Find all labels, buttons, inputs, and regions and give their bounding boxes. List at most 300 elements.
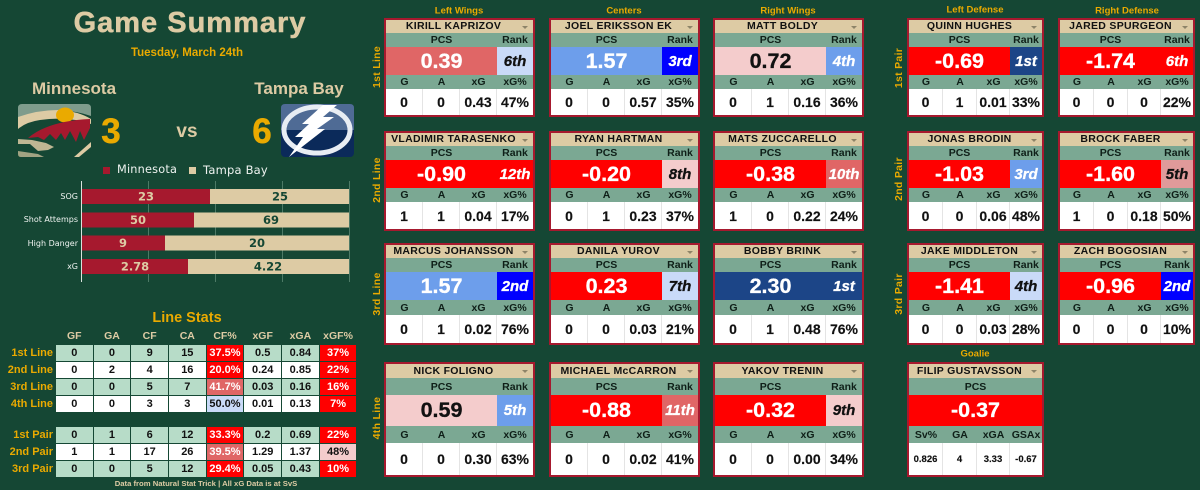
table: forward line stats: 0.5 (255, 347, 270, 359)
player card: Danila Yurov: PCS (596, 259, 617, 271)
table: defense pair stats: 12 (181, 463, 193, 475)
player card: Quinn Hughes: A (956, 76, 964, 88)
table: defense pair stats: 0 (71, 429, 77, 441)
player card: Kirill Kaprizov: 0 (437, 94, 445, 110)
player card: Mats Zuccarello: 1 (729, 208, 737, 224)
bar chart: team comparison: 4.22 (254, 260, 282, 274)
player card: Yakov Trenin (713, 362, 864, 477)
player card: Matt Boldy: 0 (729, 94, 737, 110)
player card: Matt Boldy: A (767, 76, 774, 88)
player card: Marcus Johansson: MARCUS JOHANSSON (393, 245, 514, 257)
player card: Jonas Brodin: G (922, 189, 930, 201)
column label: Goalie: Goalie (960, 348, 990, 360)
player card: Marcus Johansson: 0.02 (464, 321, 492, 337)
player card: Brock Faber: 0 (1107, 208, 1114, 224)
bar chart: team comparison: 25 (272, 190, 288, 204)
player card: Matt Boldy: xG% (832, 76, 856, 88)
player card: Danila Yurov: G (565, 302, 574, 314)
bar chart: team comparison: 2.78 (121, 260, 149, 274)
player card: Nick Foligno: 0.30 (464, 451, 492, 467)
player card: Marcus Johansson: 0 (400, 321, 408, 337)
player card: Michael McCarron: -0.88 (582, 398, 631, 422)
row label: 1st Line: 1st Line (371, 46, 383, 88)
player card: Jake Middleton: 0 (956, 321, 963, 337)
player card: Ryan Hartman: 8th (669, 166, 691, 182)
bar chart: team comparison: 50 (130, 213, 146, 227)
table: defense pair stats: 0 (109, 463, 115, 475)
player card: Vladimir Tarasenko (384, 131, 535, 231)
player card: Jake Middleton: A (956, 302, 964, 314)
table: forward line stats: 3 (147, 398, 153, 410)
player card: Ryan Hartman (549, 131, 700, 231)
player card: Mats Zuccarello: xG% (832, 189, 856, 201)
player card: Matt Boldy (713, 18, 864, 117)
table: defense pair stats: 17 (144, 446, 156, 458)
goalie card: Filip Gustavsson (907, 362, 1044, 477)
player card: Joel Eriksson Ek: 0.57 (629, 94, 657, 110)
player card: Yakov Trenin: -0.32 (746, 398, 795, 422)
player card: Vladimir Tarasenko: G (400, 189, 409, 201)
bar chart: team comparison: xG (67, 262, 78, 271)
player card: Jared Spurgeon: 0 (1107, 94, 1114, 110)
player card: Jared Spurgeon: 22% (1163, 94, 1191, 110)
player card: Nick Foligno: 0.59 (421, 398, 462, 422)
player card: Zach Bogosian: A (1107, 302, 1115, 314)
table column headers: GF (67, 330, 82, 342)
row label: 1st Pair: 1st Pair (893, 48, 905, 88)
player card: Vladimir Tarasenko: 17% (501, 208, 529, 224)
player card: Michael McCarron: xG (636, 428, 650, 440)
player card: Nick Foligno: Rank (502, 380, 528, 392)
player card: Quinn Hughes: QUINN HUGHES (927, 20, 1012, 32)
team name: Minnesota: Minnesota (32, 79, 116, 98)
table: forward line stats: 0.16 (290, 381, 311, 393)
player card: Michael McCarron: 11th (665, 402, 695, 419)
table: forward line stats (56, 345, 356, 412)
player card: Jared Spurgeon: xG (1137, 76, 1152, 88)
player card: Joel Eriksson Ek: PCS (596, 34, 617, 46)
player card: Marcus Johansson: xG (471, 302, 486, 314)
table: forward line stats: 0 (71, 381, 77, 393)
player card: Bobby Brink: 1st (833, 278, 855, 294)
player card: Kirill Kaprizov: KIRILL KAPRIZOV (406, 20, 501, 32)
goalie card: Filip Gustavsson: GA (952, 428, 968, 440)
player card: Yakov Trenin: 0.00 (793, 451, 821, 467)
player card: Marcus Johansson: Rank (502, 259, 528, 271)
player card: Matt Boldy: 36% (830, 94, 858, 110)
player card: Zach Bogosian: 0 (1107, 321, 1114, 337)
table: forward line stats: 20.0% (209, 364, 241, 376)
table column headers: CF% (213, 330, 237, 342)
player card: Bobby Brink: xG% (832, 302, 856, 314)
player card: Bobby Brink: BOBBY BRINK (744, 245, 821, 257)
table: defense pair stats: 0.05 (252, 463, 273, 475)
player card: Zach Bogosian: 0 (1073, 321, 1080, 337)
player card: Vladimir Tarasenko: xG (471, 189, 486, 201)
player card: Nick Foligno: xG% (503, 428, 527, 440)
player card: Kirill Kaprizov: PCS (431, 34, 452, 46)
player card: Matt Boldy: G (729, 76, 738, 88)
title: Game Summary (74, 7, 306, 39)
player card: Danila Yurov: 0 (565, 321, 573, 337)
row labels: lines: 4th Line (11, 398, 53, 410)
table: defense pair stats: 29.4% (209, 463, 241, 475)
player card: Vladimir Tarasenko: -0.90 (417, 162, 466, 186)
player card: Jake Middleton: G (922, 302, 930, 314)
table: forward line stats: 7 (184, 381, 190, 393)
player card: Danila Yurov: 0 (602, 321, 610, 337)
player card: Danila Yurov: xG (636, 302, 650, 314)
score: Minnesota: 3 (101, 112, 121, 151)
player card: Ryan Hartman: G (565, 189, 574, 201)
player card: Yakov Trenin: 0 (729, 451, 737, 467)
player card: Kirill Kaprizov: 0.43 (464, 94, 492, 110)
table: defense pair stats: 0 (71, 463, 77, 475)
bar chart: team comparison: 23 (138, 190, 154, 204)
player card: Jake Middleton: xG% (1014, 302, 1038, 314)
player card: Joel Eriksson Ek: xG (636, 76, 650, 88)
footer note: Data from Natural Stat Trick | All xG Data is at SvS (115, 479, 297, 488)
goalie card: Filip Gustavsson: Sv% (915, 428, 937, 440)
player card: Bobby Brink: A (767, 302, 774, 314)
versus label: vs (176, 121, 198, 142)
table: forward line stats: 0 (109, 381, 115, 393)
player card: Mats Zuccarello: 10th (829, 166, 859, 182)
column label: Right Wings: Right Wings (760, 6, 816, 16)
player card: Ryan Hartman: 1 (602, 208, 610, 224)
table: defense pair stats: 22% (327, 429, 349, 441)
player card: Marcus Johansson: 1 (437, 321, 445, 337)
player card: Joel Eriksson Ek: JOEL ERIKSSON EK (565, 20, 672, 32)
player card: Matt Boldy: 0.16 (793, 94, 821, 110)
player card: Nick Foligno: G (400, 428, 409, 440)
goalie card: Filip Gustavsson: GSAx (1012, 428, 1040, 440)
player card: Jake Middleton (907, 243, 1044, 345)
player card: Brock Faber: 0.18 (1130, 208, 1158, 224)
player card: Quinn Hughes: G (922, 76, 930, 88)
player card: Matt Boldy: 1 (766, 94, 774, 110)
player card: Quinn Hughes: xG% (1014, 76, 1038, 88)
player card: Jake Middleton: xG (986, 302, 1000, 314)
player card: Michael McCarron: MICHAEL McCARRON (560, 365, 677, 377)
player card: Matt Boldy: MATT BOLDY (747, 20, 818, 32)
player card: Kirill Kaprizov: xG% (503, 76, 527, 88)
bar chart: team comparison: SOG (60, 192, 78, 201)
player card: Brock Faber: BROCK FABER (1080, 133, 1161, 145)
player card: Brock Faber: xG% (1165, 189, 1189, 201)
column label: Left Wings: Left Wings (435, 6, 483, 16)
chart legend: Minnesota (117, 163, 177, 176)
player card: Bobby Brink: 1 (766, 321, 774, 337)
player card: Brock Faber (1058, 131, 1195, 231)
player card: Nick Foligno: 5th (504, 402, 526, 419)
column label: Centers: Centers (606, 6, 642, 16)
player card: Jonas Brodin: 0.06 (979, 208, 1007, 224)
table: forward line stats: 0 (71, 347, 77, 359)
bar chart: team comparison: High Danger (28, 239, 79, 248)
player card: Jake Middleton: 0 (922, 321, 929, 337)
player card: Zach Bogosian: 2nd (1164, 278, 1190, 294)
player card: Yakov Trenin: Rank (831, 380, 857, 392)
player card: Matt Boldy: 0.72 (750, 48, 791, 72)
player card: Kirill Kaprizov: 47% (501, 94, 529, 110)
table: forward line stats: 9 (147, 347, 153, 359)
player card: Marcus Johansson: 1.57 (421, 274, 462, 298)
player card: Nick Foligno (384, 362, 535, 477)
goalie card: Filip Gustavsson: 3.33 (984, 454, 1002, 464)
player card: Quinn Hughes: Rank (1013, 34, 1039, 46)
row label: 2nd Line: 2nd Line (371, 157, 383, 203)
row label: 2nd Pair: 2nd Pair (893, 157, 905, 201)
player card: Jonas Brodin: JONAS BRODIN (927, 133, 1012, 145)
player card: Marcus Johansson: xG% (503, 302, 527, 314)
player card: Michael McCarron: G (565, 428, 574, 440)
player card: Vladimir Tarasenko: 12th (500, 166, 530, 182)
player card: Jonas Brodin: Rank (1013, 147, 1039, 159)
player card: Zach Bogosian: 0 (1140, 321, 1148, 337)
row labels: lines: 2nd Line (8, 364, 53, 376)
player card: Jared Spurgeon: JARED SPURGEON (1069, 20, 1172, 32)
table: defense pair stats: 12 (181, 429, 193, 441)
player card: Michael McCarron (549, 362, 700, 477)
player card: Jonas Brodin: 0 (922, 208, 929, 224)
table: defense pair stats: 1 (71, 446, 77, 458)
player card: Bobby Brink: 0 (729, 321, 737, 337)
table column headers: GA (104, 330, 120, 342)
row labels: pairs: 2nd Pair (10, 446, 53, 458)
column label: Right Defense: Right Defense (1095, 6, 1159, 16)
player card: Matt Boldy: 4th (833, 52, 855, 70)
player card: Yakov Trenin: YAKOV TRENIN (742, 365, 823, 377)
table: defense pair stats (56, 427, 356, 477)
player card: Joel Eriksson Ek: Rank (667, 34, 693, 46)
player card: Yakov Trenin: G (729, 428, 738, 440)
player card: Matt Boldy: xG (800, 76, 814, 88)
player card: Jared Spurgeon: A (1107, 76, 1115, 88)
player card: Kirill Kaprizov: xG (471, 76, 486, 88)
table: defense pair stats: 0.2 (255, 429, 270, 441)
column label: Left Defense: Left Defense (946, 4, 1004, 16)
player card: Nick Foligno: xG (471, 428, 486, 440)
player card: Quinn Hughes: 0.01 (979, 94, 1007, 110)
heading: Line Stats: Line Stats (152, 310, 222, 326)
player card: Jared Spurgeon: xG% (1165, 76, 1189, 88)
player card: Michael McCarron: 0.02 (629, 451, 657, 467)
player card: Ryan Hartman: A (603, 189, 610, 201)
player card: Michael McCarron: 41% (666, 451, 694, 467)
player card: Mats Zuccarello (713, 131, 864, 231)
player card: Danila Yurov: DANILA YUROV (577, 245, 660, 257)
goalie card: Filip Gustavsson: PCS (965, 380, 986, 392)
player card: Jonas Brodin: xG (986, 189, 1000, 201)
player card: Jonas Brodin (907, 131, 1044, 231)
goalie card: Filip Gustavsson: -0.67 (1015, 454, 1037, 464)
player card: Quinn Hughes: 1st (1015, 52, 1037, 70)
player card: Quinn Hughes: xG (986, 76, 1000, 88)
player card: Brock Faber: PCS (1100, 147, 1121, 159)
bar chart: team comparison: Shot Attemps (24, 215, 78, 224)
player card: Jonas Brodin: 3rd (1014, 166, 1038, 182)
player card: Kirill Kaprizov (384, 18, 535, 117)
player card: Vladimir Tarasenko: xG% (503, 189, 527, 201)
player card: Zach Bogosian: G (1073, 302, 1081, 314)
player card: Ryan Hartman: Rank (667, 147, 693, 159)
player card: Matt Boldy: Rank (831, 34, 857, 46)
player card: Yakov Trenin: xG% (832, 428, 856, 440)
player card: Jared Spurgeon: 6th (1166, 52, 1188, 70)
player card: Ryan Hartman: PCS (596, 147, 617, 159)
table: defense pair stats: 39.5% (209, 446, 241, 458)
player card: Danila Yurov: 0.23 (586, 274, 627, 298)
bar chart: team comparison: 69 (263, 213, 279, 227)
player card: Nick Foligno: 0 (437, 451, 445, 467)
player card: Zach Bogosian: xG (1137, 302, 1152, 314)
table: defense pair stats: 48% (327, 446, 349, 458)
player card: Yakov Trenin: 0 (766, 451, 774, 467)
date: Tuesday, March 24th (131, 47, 243, 59)
player card: Bobby Brink: Rank (831, 259, 857, 271)
player card: Zach Bogosian: Rank (1164, 259, 1190, 271)
player card: Vladimir Tarasenko: A (438, 189, 445, 201)
table: forward line stats: 15 (181, 347, 193, 359)
goalie card: Filip Gustavsson: FILIP GUSTAVSSON (917, 365, 1022, 377)
player card: Quinn Hughes: PCS (949, 34, 970, 46)
player card: Danila Yurov: xG% (668, 302, 692, 314)
player card: Joel Eriksson Ek: 1.57 (586, 48, 627, 72)
player card: Zach Bogosian: 10% (1163, 321, 1191, 337)
table: forward line stats: 4 (147, 364, 153, 376)
player card: Bobby Brink: 2.30 (750, 274, 791, 298)
player card: Ryan Hartman: 0.23 (629, 208, 657, 224)
player card: Joel Eriksson Ek: 0 (602, 94, 610, 110)
table column headers: CA (180, 330, 195, 342)
player card: Nick Foligno: 0 (400, 451, 408, 467)
row labels: pairs: 3rd Pair (12, 463, 53, 475)
player card: Brock Faber: A (1107, 189, 1115, 201)
player card: Bobby Brink (713, 243, 864, 345)
player card: Jared Spurgeon: 0 (1140, 94, 1148, 110)
player card: Michael McCarron: Rank (667, 380, 693, 392)
player card: Marcus Johansson: A (438, 302, 445, 314)
player card: Kirill Kaprizov: G (400, 76, 409, 88)
player card: Kirill Kaprizov: A (438, 76, 445, 88)
player card: Brock Faber: 1 (1073, 208, 1080, 224)
player card: Vladimir Tarasenko: VLADIMIR TARASENKO (391, 133, 516, 145)
player card: Jonas Brodin: 48% (1012, 208, 1040, 224)
goalie card: Filip Gustavsson: 4 (957, 454, 962, 464)
player card: Joel Eriksson Ek: G (565, 76, 574, 88)
table: defense pair stats: 5 (147, 463, 153, 475)
table: defense pair stats: 10% (327, 463, 349, 475)
player card: Yakov Trenin: xG (800, 428, 814, 440)
player card: Jonas Brodin: 0 (956, 208, 963, 224)
icon: Tampa Bay logo (281, 104, 354, 157)
player card: Bobby Brink: 0.48 (793, 321, 821, 337)
player card: Jared Spurgeon: Rank (1164, 34, 1190, 46)
player card: Joel Eriksson Ek: 0 (565, 94, 573, 110)
player card: Ryan Hartman: xG (636, 189, 650, 201)
player card: Mats Zuccarello: 24% (830, 208, 858, 224)
bar chart: team comparison: 20 (249, 236, 265, 250)
row labels: pairs: 1st Pair (13, 429, 53, 441)
table: forward line stats: 7% (330, 398, 346, 410)
table: defense pair stats: 6 (147, 429, 153, 441)
player card: Brock Faber: -1.60 (1086, 162, 1135, 186)
player card: Bobby Brink: PCS (760, 259, 781, 271)
player card: Mats Zuccarello: MATS ZUCCARELLO (728, 133, 837, 145)
player card: Kirill Kaprizov: 0.39 (421, 48, 462, 72)
player card: Bobby Brink: G (729, 302, 738, 314)
table column headers: xGA (290, 330, 311, 342)
player card: Yakov Trenin: 34% (830, 451, 858, 467)
table: forward line stats: 50.0% (209, 398, 241, 410)
player card: Danila Yurov: Rank (667, 259, 693, 271)
player card: Quinn Hughes: 33% (1012, 94, 1040, 110)
player card: Vladimir Tarasenko: PCS (431, 147, 452, 159)
player card: Mats Zuccarello: 0.22 (793, 208, 821, 224)
table: defense pair stats: 1 (109, 446, 115, 458)
player card: Kirill Kaprizov: 0 (400, 94, 408, 110)
chart legend (103, 163, 268, 177)
player card: Joel Eriksson Ek: A (603, 76, 610, 88)
player card: Quinn Hughes: -0.69 (935, 48, 984, 72)
player card: Marcus Johansson (384, 243, 535, 345)
table: forward line stats: 0.01 (252, 398, 273, 410)
player card: Jake Middleton: PCS (949, 259, 970, 271)
player card: Yakov Trenin: A (767, 428, 774, 440)
player card: Zach Bogosian (1058, 243, 1195, 345)
player card: Quinn Hughes: 1 (956, 94, 963, 110)
player card: Kirill Kaprizov: Rank (502, 34, 528, 46)
player card: Matt Boldy: PCS (760, 34, 781, 46)
player card: Nick Foligno: NICK FOLIGNO (413, 365, 494, 377)
table: forward line stats: 0.03 (252, 381, 273, 393)
player card: Jonas Brodin: xG% (1014, 189, 1038, 201)
player card: Zach Bogosian: ZACH BOGOSIAN (1074, 245, 1167, 257)
player card: Mats Zuccarello: A (767, 189, 774, 201)
player card: Jonas Brodin: A (956, 189, 964, 201)
chart legend: Tampa Bay (203, 163, 268, 177)
player card: Joel Eriksson Ek: 35% (666, 94, 694, 110)
table: forward line stats: 0 (109, 398, 115, 410)
table column headers (67, 330, 353, 342)
player card: Vladimir Tarasenko: Rank (502, 147, 528, 159)
player card: Mats Zuccarello: 0 (766, 208, 774, 224)
table: forward line stats: 0.85 (290, 364, 311, 376)
player card: Brock Faber: xG (1137, 189, 1152, 201)
player card: Vladimir Tarasenko: 1 (437, 208, 445, 224)
player card: Kirill Kaprizov: 6th (504, 52, 526, 70)
player card: Jake Middleton: JAKE MIDDLETON (921, 245, 1018, 257)
player card: Jake Middleton: -1.41 (935, 274, 984, 298)
table: defense pair stats: 0.69 (290, 429, 311, 441)
player card: Jake Middleton: 28% (1012, 321, 1040, 337)
player card: Marcus Johansson: 2nd (502, 278, 528, 294)
table column headers: xGF (252, 330, 273, 342)
table: forward line stats: 3 (184, 398, 190, 410)
table: forward line stats: 41.7% (209, 381, 241, 393)
player card: Quinn Hughes (907, 18, 1044, 117)
player card: Joel Eriksson Ek (549, 18, 700, 117)
table: forward line stats: 37.5% (209, 347, 241, 359)
player card: Marcus Johansson: PCS (431, 259, 452, 271)
player card: Brock Faber: G (1073, 189, 1081, 201)
player card: Ryan Hartman: RYAN HARTMAN (574, 133, 662, 145)
player card: Jared Spurgeon: -1.74 (1086, 48, 1135, 72)
player card: Marcus Johansson: 76% (501, 321, 529, 337)
player card: Zach Bogosian: xG% (1165, 302, 1189, 314)
player card: Yakov Trenin: PCS (760, 380, 781, 392)
